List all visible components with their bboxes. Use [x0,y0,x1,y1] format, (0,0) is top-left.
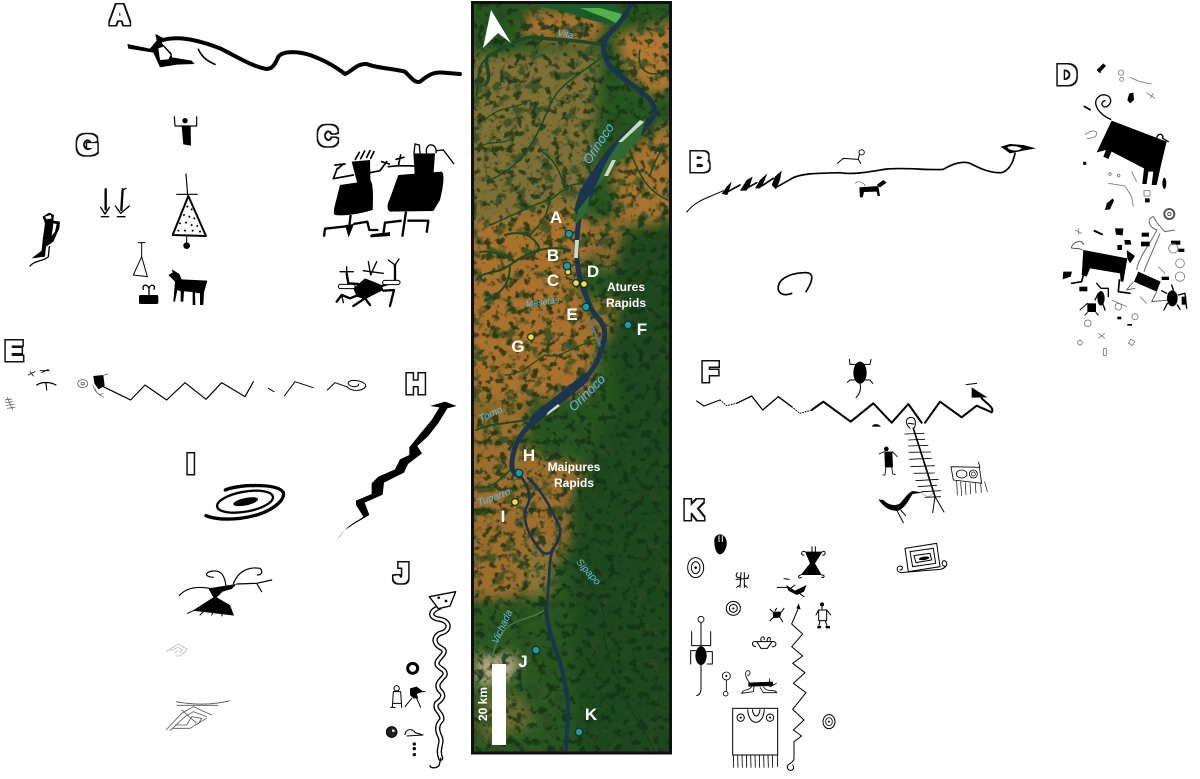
scale bar: 20 km [476,687,490,721]
glyph B: serpent with bird head and animals [687,144,1036,295]
icon: north arrow [483,10,511,48]
glyph I: lined geometric panel [166,701,230,731]
panel letter I: I [187,449,195,479]
panel letter F: F [702,357,718,387]
glyph F: zigzag serpent with lizard, ladder and bird [697,359,992,573]
panel letter A: A [110,0,130,30]
river labels: Mesetas [525,295,561,309]
site labels: K [585,705,598,724]
panel letter B: B [690,147,710,177]
site labels [501,208,647,724]
site labels: I [501,507,505,526]
site labels: D [587,262,599,281]
site markers [512,230,632,736]
panel letter H: H [406,369,426,399]
river labels: Tomo [477,404,505,425]
panel letter J: J [394,558,409,588]
river labels: Sipapo [573,557,603,588]
river islands [546,118,646,416]
site labels: F [637,320,647,339]
glyph E: zigzag serpent with spiral [5,369,366,410]
site labels: E [566,305,578,324]
river labels: Tuparro [476,486,513,509]
map base terrain [474,4,669,752]
glyph I: spiral [206,485,283,519]
Maipures Rapids label [548,460,601,490]
glyph C: two large figures and creature [324,144,454,306]
panel letter G: G [77,130,98,160]
glyph I: branched figure [179,568,272,616]
top wetland [530,4,622,25]
site labels: G [511,337,525,356]
river labels: Orinoco [580,120,617,167]
river labels: Vita [557,28,574,41]
glyph J: wavy snake with small figures [386,592,456,768]
river labels [476,28,617,646]
panel: satellite map of the Orinoco [465,2,680,760]
panel letter D: D [1057,60,1076,90]
panel letter E: E [5,336,23,366]
Atures Rapids label [606,280,646,310]
map texture [474,4,670,752]
scale bar [476,664,506,745]
site labels: H [523,446,535,465]
glyph D: cluster of animals and figures [1063,63,1187,356]
site labels: A [550,208,562,227]
map frame [472,2,670,753]
Atures Rapids label: Rapids [606,296,646,310]
glyph A: long serpent [127,34,460,82]
river labels: Orinoco [565,371,608,414]
glyph G: figures, triangles and animal [30,117,207,305]
river labels: Vichada [490,608,515,646]
Maipures Rapids label: Maipures [548,460,601,474]
glyph K: cluster of figures and zigzag serpent [688,534,835,770]
Atures Rapids label: Atures [607,280,645,294]
site labels: C [547,271,559,290]
tributaries [476,37,668,752]
site labels: J [518,652,528,671]
glyph I: faint geometric marks [166,644,187,656]
panel letter K: K [684,495,704,525]
site labels: B [547,246,559,265]
Orinoco river [512,2,654,755]
Maipures Rapids label: Rapids [554,476,594,490]
panel letter C: C [318,121,338,151]
glyph H: vertical serpent [336,402,457,541]
